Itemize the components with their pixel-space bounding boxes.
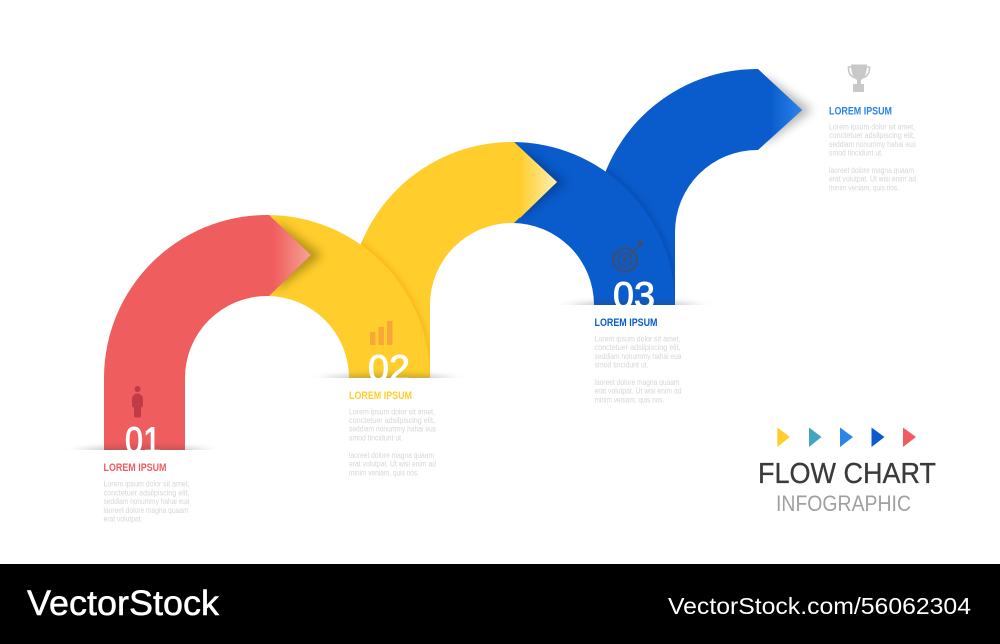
text block: step 03: seddiam nonummy hahai eua — [594, 352, 682, 361]
text block: step 02: conctetuer adsilpiscing elit, — [349, 416, 435, 425]
text block: step 04: erat volutpat. Ut wisi enim ad — [829, 174, 916, 184]
baseline shadow: step 03 — [568, 299, 700, 305]
text block: step 02: erat volutpat. Ut wisi enim ad — [349, 460, 436, 468]
panel: step 03 descending blue arc — [512, 142, 675, 305]
text block: step 01: conctetuer adsilpiscing elit, — [104, 488, 190, 498]
icon: target — [613, 239, 645, 272]
text block: step 04: Lorem ipsum dolor sit amet, — [829, 122, 915, 132]
text block: step 03: minim veniam, quis nos. — [594, 396, 664, 404]
footer bar — [0, 564, 1000, 644]
number 01: 01 — [125, 420, 161, 461]
panel: step 02 descending yellow arc — [267, 215, 430, 378]
blue arrow tip highlight — [770, 81, 802, 139]
icon: person — [132, 386, 143, 418]
panel: step 01 rising red arrow — [104, 215, 311, 450]
text block: step 02: smod tincidunt ut. — [349, 434, 403, 442]
text block: step 01: Lorem ipsum dolor sit amet, — [104, 480, 190, 488]
blue arrow soft shadow — [764, 76, 812, 144]
text block: step 04 — [829, 106, 916, 192]
text block: step 01: erat volutpat. — [104, 514, 142, 524]
text block: step 03: laoreet dolore magna quaam — [594, 378, 680, 387]
text block: step 04: seddiam nonummy hahai eus — [829, 140, 916, 149]
subtitle: INFOGRAPHIC — [776, 491, 911, 516]
panel: step 02 rising yellow arrow — [349, 142, 557, 378]
text block: step 04: laoreet dolore magna quaam — [829, 166, 914, 175]
baseline shadow: step 01 — [76, 444, 210, 450]
text block: step 04: conctetuer adsilpiscing elit, — [829, 131, 915, 140]
text block: step 01: LOREM IPSUM — [104, 462, 166, 474]
text block: step 01: laoreet dolore magna quaam — [104, 506, 189, 515]
legend: coloured triangles — [777, 428, 916, 447]
text block: step 02: laoreet dolore magna quaam — [349, 451, 434, 460]
icon: bar chart — [370, 321, 392, 345]
panel: step 03 rising blue arrow — [594, 69, 802, 305]
text block: step 02 — [349, 390, 436, 478]
text block: step 02: minim veniam, quis nos. — [349, 468, 419, 478]
text block: step 03: LOREM IPSUM — [594, 317, 658, 329]
text block: step 03 — [594, 317, 682, 404]
text block: step 01: seddiam nonummy hahai eua — [104, 497, 190, 506]
number 03: 03 — [613, 275, 655, 316]
baseline shadow: step 02 — [322, 371, 454, 378]
text block: step 03: smod tincidunt ut. — [594, 360, 648, 370]
red arrow tip highlight — [273, 219, 311, 292]
number 02: 02 — [368, 348, 410, 389]
text block: step 03: Lorem ipsum dolor sit amet, — [594, 334, 680, 344]
footer brand: VectorStock — [27, 584, 220, 623]
title: FLOW CHART — [758, 458, 936, 490]
text block: step 02: seddiam nonummy hahai eus — [349, 424, 436, 434]
shadow of yellow arrow on blue arc — [522, 148, 566, 217]
yellow arrow tip highlight — [520, 148, 557, 218]
text block: step 01 — [104, 462, 190, 524]
footer id: VectorStock.com/56062304 — [668, 593, 971, 619]
text block: step 04: LOREM IPSUM — [829, 106, 892, 118]
text block: step 03: erat volutpat. Ut wisi enim ad — [594, 386, 682, 396]
text block: step 02: LOREM IPSUM — [349, 390, 412, 402]
shadow of red arrow on yellow arc — [277, 222, 322, 290]
text block: step 04: smod tincidunt ut. — [829, 148, 883, 158]
icon: trophy — [848, 64, 870, 92]
text block: step 04: minim veniam, quis nos. — [829, 184, 899, 192]
text block: step 03: conctetuer adsilpiscing elit, — [594, 343, 680, 352]
text block: step 02: Lorem ipsum dolor sit amet, — [349, 408, 435, 416]
